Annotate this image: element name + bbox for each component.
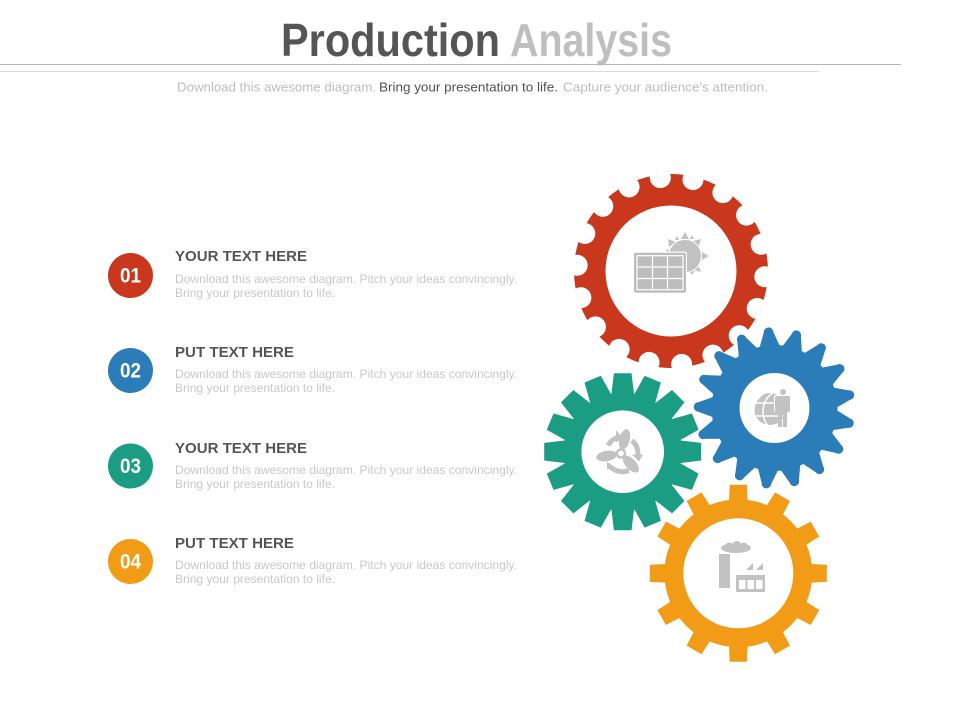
icon: wind turbine fan	[595, 428, 643, 475]
badge 02: 02	[120, 360, 141, 382]
badge 04	[108, 539, 153, 584]
description 03: Bring your presentation to life.	[175, 477, 335, 491]
description 04: Download this awesome diagram. Pitch your ideas convincingly.	[175, 558, 517, 572]
gear: blue	[694, 327, 856, 490]
badge 01	[108, 253, 153, 298]
description 02: Bring your presentation to life.	[175, 381, 335, 395]
description 04: Bring your presentation to life.	[175, 572, 335, 586]
list item 03	[108, 440, 517, 491]
title: Production	[281, 14, 500, 66]
description 02: Download this awesome diagram. Pitch your ideas convincingly.	[175, 367, 517, 381]
badge 04: 04	[120, 550, 141, 574]
heading 01: YOUR TEXT HERE	[175, 248, 307, 265]
description 04	[175, 558, 517, 586]
heading 02: PUT TEXT HERE	[175, 344, 294, 361]
description 01: Download this awesome diagram. Pitch your ideas convincingly.	[175, 272, 517, 286]
description 03	[175, 463, 517, 491]
description 03: Download this awesome diagram. Pitch your ideas convincingly.	[175, 463, 517, 477]
subtitle: Capture your audience's attention.	[563, 80, 768, 94]
badge 02	[108, 348, 153, 393]
list item 01	[108, 248, 517, 300]
list item 02	[108, 344, 517, 395]
icon: globe and people	[754, 389, 791, 427]
description 01	[175, 272, 517, 300]
subtitle: Bring your presentation to life.	[379, 80, 558, 94]
subtitle: Download this awesome diagram.	[177, 80, 376, 94]
description 01: Bring your presentation to life.	[175, 286, 335, 300]
badge 01: 01	[120, 264, 141, 288]
gear: orange	[650, 485, 827, 662]
badge 03	[108, 444, 153, 488]
heading 04: PUT TEXT HERE	[175, 535, 294, 552]
icon: factory	[719, 541, 765, 592]
badge 03: 03	[120, 455, 141, 478]
heading 03: YOUR TEXT HERE	[175, 440, 307, 457]
gear: green	[544, 373, 701, 530]
subtitle	[177, 80, 768, 94]
gear: red	[566, 166, 776, 376]
title	[281, 14, 672, 66]
icon: solar panel and sun	[633, 232, 709, 294]
title: Analysis	[510, 14, 672, 66]
description 02	[175, 367, 517, 395]
list item 04	[108, 535, 517, 586]
